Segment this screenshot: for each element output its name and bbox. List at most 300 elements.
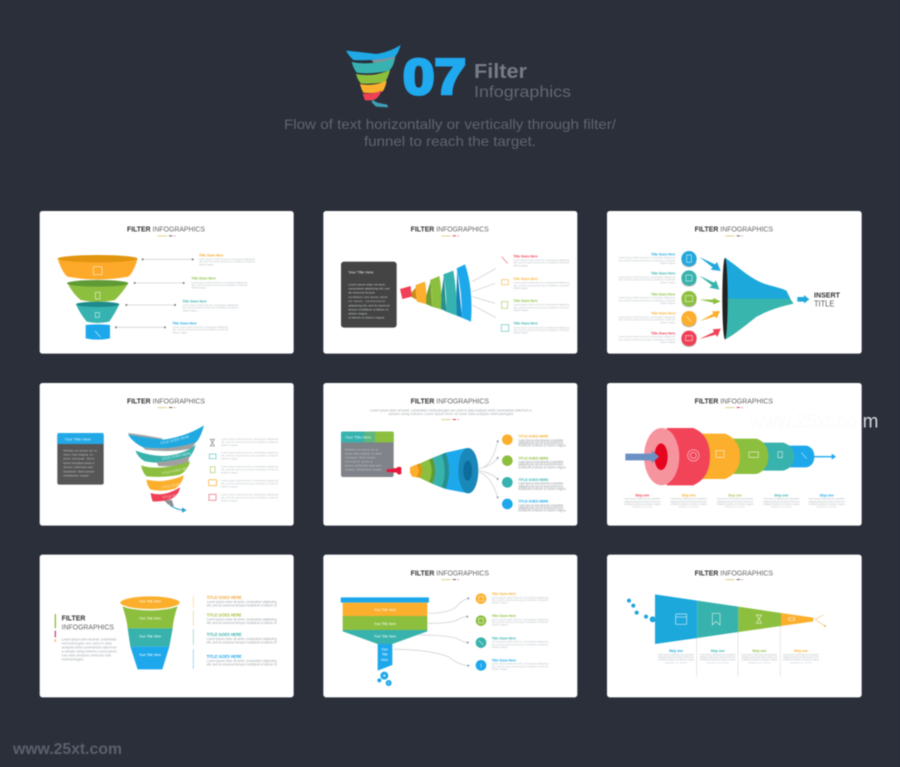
text box: Nullam eu ipsum ac ut: [63, 449, 97, 453]
insert title label: [814, 292, 841, 309]
text item 4: elit, sed do eiusmod tempor incididunt ut labore: [619, 318, 676, 322]
text box: cursus. Vestibulum neque: [345, 468, 382, 472]
step 3: Lorem ipsum dolor sit amet, consectetur: [717, 497, 753, 501]
bubbles: [377, 672, 392, 686]
step 2: aliqua ut enim: [707, 660, 729, 664]
text item 2: dolore magna: [513, 286, 528, 290]
step 3: Step one: [752, 649, 767, 653]
text item 3: Title Goes Here: [513, 299, 538, 303]
header subtitle: Flow of text horizontally or vertically through filter/: [284, 116, 616, 132]
text box: [57, 433, 104, 485]
step 1: Lorem ipsum dolor sit amet, consectetur: [658, 652, 694, 656]
text item 3: Lorem ipsum dolor sit amet, consectetur adipiscing: [513, 303, 570, 307]
left accent bars: [55, 614, 56, 642]
text box: nunc vita magna, et: [63, 453, 93, 457]
text item 3: elit, sed do eiusmod tempor incididunt ut labore: [182, 306, 239, 310]
text item 3: Lorem ipsum dolor sit amet, consectetur adipiscing: [492, 640, 549, 644]
text item 1: TITLE GOES HERE: [518, 435, 549, 439]
cup funnel: [120, 596, 180, 669]
card title: FILTER INFOGRAPHICS: [411, 396, 489, 405]
card title: FILTER INFOGRAPHICS: [127, 396, 205, 405]
text box: lorem tincidunt ante a: [63, 461, 94, 465]
step 5: adipiscing elit, sed do eiusmod tempor: [808, 499, 845, 503]
text item 4: Lorem ipsum dolor sit amet, consectetur adipiscing: [513, 325, 570, 329]
text item 4: TITLE GOES HERE: [207, 654, 242, 659]
text item 2: adipiscing elit, sed do eiusmod tempor: [518, 463, 564, 467]
funnel labels: Your Title Here: [374, 622, 396, 626]
text item 2: dolore magna: [660, 280, 676, 284]
text item 1: [619, 252, 676, 265]
step 4: Step one: [794, 649, 808, 653]
text item 4: elit, sed do eiusmod tempor incididunt ut labore et: [207, 662, 277, 666]
text item 2: Lorem ipsum dolor sit amet, consectetur adipiscing: [513, 281, 570, 285]
funnel labels: Your Title Here: [139, 653, 161, 657]
numbered circles: [502, 434, 513, 509]
text box: ipsum vehicula sed sed: [345, 464, 381, 468]
text item 3: elit, sed do eiusmod tempor incididunt ut labore: [492, 642, 549, 646]
text item 3: elit, sed do eiusmod tempor incididunt ut labore: [513, 305, 570, 309]
text item 1: Title Goes Here: [651, 252, 675, 256]
particle dots: [627, 599, 656, 622]
step 5: aliqua ut enim: [817, 505, 837, 509]
output arrow: [797, 295, 809, 303]
text item 3: incididunt ut labore et dolore magna: [518, 487, 566, 491]
output arrow: [813, 454, 836, 460]
card background: [607, 383, 862, 526]
text item 4: Lorem ipsum dolor sit amet, consectetur adipiscing: [492, 662, 549, 666]
text item 4: [492, 658, 549, 671]
text item 3: [182, 299, 239, 312]
left text block: a sample using indexes Lorem ipsum: [62, 649, 117, 653]
title accent: [441, 235, 459, 236]
text item 3: dolore magna: [492, 645, 508, 649]
watermark letter: m: [863, 411, 878, 432]
text item 2: elit, sed do eiusmod tempor incididunt ut labore: [191, 283, 248, 287]
header subtitle: funnel to reach the target.: [364, 133, 536, 149]
text item 4: [518, 500, 566, 513]
funnel labels: Your: [381, 648, 389, 652]
card title: FILTER INFOGRAPHICS: [411, 568, 489, 577]
step 2: incididunt ut labore et dolore magna: [670, 502, 707, 506]
fan lines: [472, 268, 496, 318]
funnel labels: Your Title Here: [139, 616, 161, 620]
step 1: [624, 493, 661, 509]
text item 3: Lorem ipsum dolor sit amet, consectetur adipiscing: [221, 464, 279, 468]
text item 5: Lorem ipsum dolor sit amet, consectetur adipiscing: [619, 335, 676, 339]
text item 1: incididunt ut labore et dolore magna: [518, 444, 566, 448]
step 2: [670, 493, 707, 509]
text item 2: Title Goes Here: [191, 277, 216, 281]
step 4: Lorem ipsum dolor sit amet, consectetur: [783, 652, 819, 656]
text item 4: dolore magna: [660, 320, 676, 324]
branching lines: [478, 440, 499, 498]
card title: FILTER INFOGRAPHICS: [695, 568, 773, 577]
left text block: has data analysis methods that: [62, 653, 111, 657]
step 2: [700, 649, 736, 664]
step 2: adipiscing elit, sed do eiusmod tempor: [670, 499, 707, 503]
text item 3: [492, 636, 549, 649]
step 3: aliqua ut enim: [748, 660, 771, 664]
text item 3: Lorem ipsum dolor sit amet, consectetur: [518, 482, 564, 486]
text item 4: [221, 478, 279, 488]
text item 2: elit, sed do eiusmod tempor incididunt ut labore: [619, 278, 676, 282]
text box: Nullam eu ipsum ac ut: [345, 447, 378, 451]
text item 4: Lorem ipsum dolor sit amet, consectetur adipiscing: [172, 325, 229, 329]
text item 4: elit, sed do eiusmod tempor incididunt ut labore: [221, 481, 279, 485]
wedge icons: [676, 613, 795, 625]
text item 4: [207, 654, 277, 666]
text item 5: [619, 331, 676, 344]
text item 3: [221, 464, 279, 474]
text item 2: [492, 614, 549, 627]
funnel labels: Your Title Here: [139, 600, 161, 604]
input arrow: [625, 450, 659, 463]
step 3: [741, 649, 778, 664]
text item 5: elit, sed do eiusmod tempor incididunt ut labore: [221, 495, 279, 499]
text item 2: Title Goes Here: [513, 277, 538, 281]
text item 1: Title Goes Here: [492, 592, 516, 596]
text item 2: Lorem ipsum dolor sit amet, consectetur adipiscing: [207, 618, 277, 622]
text item 4: dolore magna: [172, 330, 187, 334]
text item 3: Title Goes Here: [651, 292, 675, 296]
step 1: [658, 649, 694, 664]
card title: FILTER INFOGRAPHICS: [695, 225, 773, 234]
text item 1: elit, sed do eiusmod tempor incididunt ut labore et: [207, 603, 277, 607]
panel 4: ribbon tornado funnel: [40, 383, 294, 526]
text item 2: dolore magna: [221, 457, 238, 461]
text item 2: Lorem ipsum dolor sit amet, consectetur adipiscing: [492, 617, 549, 621]
ribbon funnel: TITLE GOES HERE: [160, 434, 191, 446]
step 1: incididunt ut labore et dolore magna: [624, 502, 661, 506]
text item 2: Title Goes Here: [492, 614, 516, 618]
card subtitle: [370, 408, 532, 416]
text item 1: Lorem ipsum dolor sit amet, consectetur adipiscing: [199, 257, 255, 261]
text item 3: elit, sed do eiusmod tempor incididunt ut labore: [221, 467, 279, 471]
panel 9: horizontal wedge funnel: [607, 555, 862, 697]
title accent: [441, 418, 459, 421]
ribbon funnel: TITLE GOES HERE: [161, 465, 192, 476]
text item 1: dolore magna: [660, 261, 676, 265]
text item 1: Lorem ipsum dolor sit amet, consectetur adipiscing: [221, 437, 279, 441]
text item 4: Title Goes Here: [172, 321, 197, 325]
text item 2: elit, sed do eiusmod tempor incididunt ut labore: [492, 620, 549, 624]
text item 5: Title Goes Here: [651, 331, 675, 335]
panel 3: arrows into cone: [607, 211, 862, 354]
dashed separators: [192, 597, 194, 669]
funnel: [341, 597, 429, 671]
circle icons: [681, 251, 697, 347]
text item 1: Lorem ipsum dolor sit amet, consectetur adipiscing: [619, 256, 676, 260]
step 3: [717, 493, 754, 509]
step 4: aliqua ut enim: [790, 660, 812, 664]
step 1: Lorem ipsum dolor sit amet, consectetur: [624, 497, 661, 501]
dark text box: Your Title Here: [348, 271, 374, 275]
step 1: adipiscing elit, sed do eiusmod tempor: [658, 655, 694, 659]
step 1: aliqua ut enim: [665, 660, 687, 664]
icons: [501, 257, 509, 331]
text item 2: [513, 277, 570, 290]
text item 2: TITLE GOES HERE: [518, 456, 549, 460]
text item 1: dolore magna: [513, 263, 528, 267]
text box: volutpat. Duis lorem: [345, 455, 376, 459]
step guide lines: [697, 626, 780, 677]
header title: Filter: Filter: [474, 61, 527, 83]
text item 1: [199, 253, 255, 266]
dark text box: consectetur adipiscing elit, sed: [348, 287, 390, 291]
title accent: [441, 579, 459, 580]
step 2: incididunt ut labore et dolore magna: [700, 658, 736, 662]
funnel: [58, 255, 138, 340]
text item 4: Lorem ipsum dolor sit amet, consectetur: [518, 503, 564, 507]
funnel labels: Here: [381, 658, 388, 662]
text item 3: dolore magna: [221, 470, 238, 474]
text box: ipsum vehicula sed: [63, 465, 93, 469]
left text block: Lorem ipsum dolor sit amet, consectetur: [62, 637, 118, 641]
text item 1: elit, sed do eiusmod tempor incididunt ut labore: [199, 260, 255, 264]
text item 4: dolore magna: [221, 484, 238, 488]
step 3: aliqua ut enim: [725, 505, 745, 509]
text item 3: Lorem ipsum dolor sit amet, consectetur adipiscing: [207, 637, 277, 641]
funnel labels: Your Title Here: [374, 608, 396, 612]
icons: [209, 439, 217, 500]
funnel labels: Your Title Here: [374, 635, 396, 639]
text item 4: Lorem ipsum dolor sit amet, consectetur adipiscing: [207, 659, 277, 663]
step 4: [763, 493, 800, 509]
step 1: Step one: [635, 493, 650, 497]
text item 1: elit, sed do eiusmod tempor incididunt ut labore: [513, 261, 570, 265]
step 3: incididunt ut labore et dolore magna: [717, 502, 754, 506]
card background: [323, 383, 577, 526]
spark at tip: [815, 615, 826, 627]
text item 1: [221, 437, 279, 447]
ribbon funnel: [400, 264, 472, 322]
card background: [323, 211, 577, 354]
text item 3: TITLE GOES HERE: [207, 632, 242, 637]
card title: FILTER INFOGRAPHICS: [695, 396, 773, 405]
panel 6: telescoping cylinders: [607, 383, 878, 526]
text box: nunc vita magna, et ante: [345, 451, 382, 455]
text item 1: Lorem ipsum dolor sit amet, consectetur adipiscing: [492, 595, 549, 599]
dark text box: ut labore et dolore magna: [348, 316, 385, 320]
step 2: Step one: [711, 649, 725, 653]
text item 2: Lorem ipsum dolor sit amet, consectetur adipiscing: [221, 451, 279, 455]
text item 1: Title Goes Here: [199, 253, 224, 257]
step 5: Step one: [820, 493, 834, 497]
step 2: adipiscing elit, sed do eiusmod tempor: [700, 655, 736, 659]
text item 2: TITLE GOES HERE: [207, 613, 242, 618]
left text block: analysis which summarizes data from: [62, 645, 117, 649]
funnel labels: [374, 608, 396, 662]
text item 1: [513, 254, 570, 267]
text item 3: [513, 299, 570, 312]
ribbon funnel: TITLE GOES HERE: [161, 451, 192, 461]
text item 1: [518, 435, 566, 448]
text item 1: elit, sed do eiusmod tempor incididunt ut labore: [619, 258, 676, 262]
text item 2: [619, 272, 676, 284]
funnel labels: Your Title Here: [139, 635, 161, 639]
step 4: Step one: [774, 493, 789, 497]
text item 3: [207, 632, 277, 644]
text item 3: Title Goes Here: [492, 636, 516, 640]
text item 3: TITLE GOES HERE: [518, 478, 549, 482]
circle icons: [476, 593, 486, 671]
funnel labels: Title: [382, 653, 388, 657]
step 4: adipiscing elit, sed do eiusmod tempor: [783, 655, 819, 659]
text item 4: Lorem ipsum dolor sit amet, consectetur adipiscing: [619, 315, 676, 319]
connector lines: [393, 597, 469, 667]
text item 4: [619, 312, 676, 324]
dark text box: do eiusmod tempor: [348, 291, 375, 295]
text item 2: Lorem ipsum dolor sit amet, consectetur adipiscing: [619, 275, 676, 279]
step 3: incididunt ut labore et dolore magna: [741, 658, 778, 662]
header title: Infographics: Infographics: [474, 84, 571, 101]
dark text box: sit amet, consectetur: [348, 299, 386, 303]
dark text box: dolore magna: [348, 311, 367, 315]
card subtitle: Lorem ipsum dolor sit amet, consectetur methodologies are used in data analysis which summarizes data from a: [370, 408, 532, 412]
funnel labels: [139, 600, 161, 657]
cone funnel: [410, 448, 478, 493]
text item 1: dolore magna: [199, 262, 214, 266]
card background: [40, 383, 294, 526]
panel 8: kitchen funnel with bubbles: [323, 555, 577, 697]
step 2: Step one: [682, 493, 696, 497]
step 5: [808, 493, 845, 509]
text item 1: adipiscing elit, sed do eiusmod tempor: [518, 441, 564, 445]
text item 2: [207, 613, 277, 625]
text item 5: [221, 492, 279, 502]
text item 3: elit, sed do eiusmod tempor incididunt ut labore et: [207, 640, 277, 644]
text item 2: elit, sed do eiusmod tempor incididunt ut labore: [221, 454, 279, 458]
text item 3: elit, sed do eiusmod tempor incididunt ut labore: [619, 298, 676, 302]
text item 3: Lorem ipsum dolor sit amet, consectetur adipiscing: [182, 303, 239, 307]
text item 4: Title Goes Here: [651, 312, 675, 316]
red input arrow: [387, 467, 401, 475]
step 2: Lorem ipsum dolor sit amet, consectetur: [670, 497, 707, 501]
text item 4: Title Goes Here: [513, 322, 538, 326]
text item 3: dolore magna: [513, 308, 528, 312]
step 4: adipiscing elit, sed do eiusmod tempor: [763, 499, 800, 503]
text item 4: incididunt ut labore et dolore magna: [518, 509, 566, 513]
dark text box: incididunt utis ipsum dolor: [348, 295, 388, 299]
text item 5: dolore magna: [660, 340, 676, 344]
step 3: Step one: [728, 493, 742, 497]
title accent: [158, 235, 175, 236]
step 4: aliqua ut enim: [771, 505, 792, 509]
left text block: methodologies are used in data: [62, 641, 112, 645]
step 1: incididunt ut labore et dolore magna: [658, 658, 694, 662]
cone funnel: [722, 258, 794, 340]
step 1: aliqua ut enim: [632, 505, 653, 509]
text item 1: elit, sed do eiusmod tempor incididunt ut labore: [492, 598, 549, 602]
ribbon funnel: [128, 425, 204, 513]
text item 1: TITLE GOES HERE: [207, 595, 242, 600]
text item 4: [513, 322, 570, 335]
left text block: methodologies: [62, 657, 84, 661]
text item 2: [191, 277, 248, 290]
text item 5: Lorem ipsum dolor sit amet, consectetur adipiscing: [221, 492, 279, 496]
step 5: incididunt ut labore et dolore magna: [808, 502, 845, 506]
dark text box: [341, 262, 397, 328]
text item 5: dolore magna: [221, 498, 238, 502]
card background: [607, 211, 862, 354]
card background: [40, 555, 294, 697]
text item 3: [518, 478, 566, 491]
card subtitle: sample using indexes Lorem ipsum dolor sit amet data analysis methodologies: [388, 412, 514, 416]
step 4: [783, 649, 819, 664]
cylinder icons: [688, 450, 807, 461]
panel 1: stacked bowl funnel: [40, 211, 294, 354]
text item 2: dolore magna: [492, 623, 508, 627]
dark text box: tempor incididunt ut labore et: [348, 307, 388, 311]
text item 1: [492, 592, 549, 605]
text box: Your Title Here: [345, 435, 372, 440]
card background: [607, 555, 862, 697]
ribbon funnel: TITLE GOES HERE: [161, 480, 192, 490]
text item 4: adipiscing elit, sed do eiusmod tempor: [518, 506, 564, 510]
text item 2: [221, 451, 279, 461]
text box: tincidunt ante a: [345, 460, 373, 464]
card title: FILTER INFOGRAPHICS: [411, 225, 489, 234]
text item 2: elit, sed do eiusmod tempor incididunt ut labore et: [207, 621, 277, 625]
step 3: adipiscing elit, sed do eiusmod tempor: [741, 655, 777, 659]
step 4: Lorem ipsum dolor sit amet, consectetur: [763, 497, 800, 501]
step 1: Step one: [669, 649, 683, 653]
text box: ante volutpat. Duis: [63, 457, 94, 461]
text item 2: Lorem ipsum dolor sit amet, consectetur adipiscing: [191, 280, 248, 284]
left heading: FILTER: [62, 614, 86, 623]
card background: [323, 555, 577, 697]
text box: [341, 432, 394, 477]
text item 5: elit, sed do eiusmod tempor incididunt ut labore: [619, 337, 676, 341]
text item 4: elit, sed do eiusmod tempor incididunt ut labore: [492, 664, 549, 668]
connector lines: [115, 258, 194, 328]
text item 4: dolore magna: [492, 667, 508, 671]
text item 2: Title Goes Here: [651, 272, 675, 276]
title accent: [725, 235, 743, 236]
card background: [40, 211, 294, 354]
text item 4: Lorem ipsum dolor sit amet, consectetur adipiscing: [221, 478, 279, 482]
step 3: adipiscing elit, sed do eiusmod tempor: [717, 499, 753, 503]
watermark ghost text: www.25xt.co: [749, 411, 857, 432]
panel 2: horizontal ribbon funnel: [323, 211, 577, 354]
step 5: Lorem ipsum dolor sit amet, consectetur: [808, 497, 845, 501]
text item 1: Lorem ipsum dolor sit amet, consectetur: [518, 438, 564, 442]
left heading: [62, 614, 114, 632]
panel 7: cup funnel with side titles: [40, 555, 294, 697]
arrows: [699, 257, 721, 339]
header logo: funnel icon: [346, 45, 401, 107]
title accent: [725, 406, 743, 409]
text item 2: dolore magna: [191, 286, 206, 290]
text item 1: dolore magna: [492, 601, 508, 605]
step 2: Lorem ipsum dolor sit amet, consectetur: [700, 652, 736, 656]
insert title label: INSERT: [814, 292, 841, 299]
step 1: adipiscing elit, sed do eiusmod tempor: [624, 499, 661, 503]
header number 07: 07: [403, 49, 466, 105]
title accent: [158, 406, 175, 409]
wedge funnel: [655, 594, 813, 644]
text item 1: [207, 595, 277, 607]
step 2: aliqua ut enim: [679, 505, 699, 509]
dark text box: adipiscing elit, sed do eiusmod: [348, 303, 390, 307]
text item 4: dolore magna: [513, 331, 528, 335]
text item 3: dolore magna: [182, 308, 197, 312]
footer watermark: www.25xt.com: [12, 741, 122, 758]
text item 4: elit, sed do eiusmod tempor incididunt ut labore: [172, 328, 229, 332]
text box: vestibulum neque: [63, 474, 89, 478]
text item 3: [619, 292, 676, 305]
text item 2: [518, 456, 566, 469]
